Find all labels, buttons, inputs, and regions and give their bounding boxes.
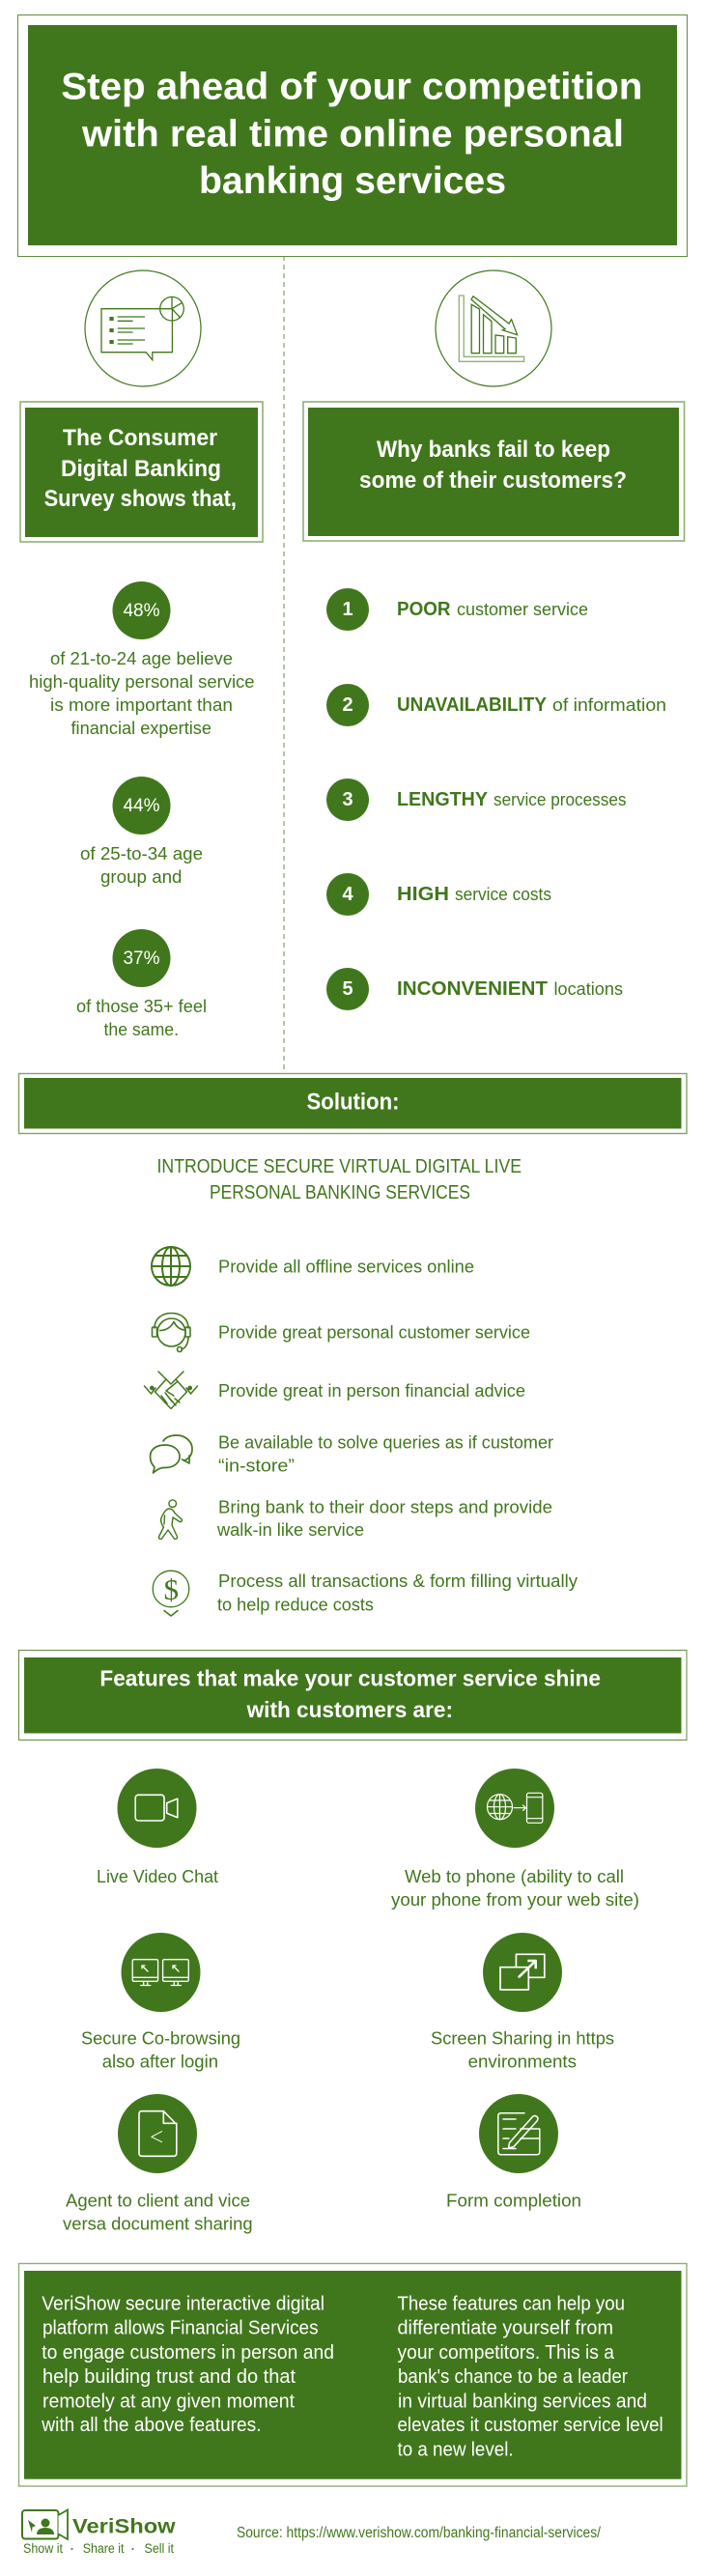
reason 2: UNAVAILABILITY <box>397 694 548 716</box>
heading: consumer survey <box>20 402 263 542</box>
heading: consumer survey: Survey shows that, <box>44 486 237 512</box>
logo: VeriShow: VeriShow <box>72 2516 176 2538</box>
solution item: solve queries: Be available to solve queries as if customer <box>218 1432 553 1452</box>
summary text: right column: elevates it customer service level <box>398 2415 663 2436</box>
feature: form completion <box>446 2094 581 2211</box>
feature: form completion: Form completion <box>446 2191 581 2211</box>
summary text: right column <box>398 2294 663 2461</box>
reason 4: service costs <box>455 885 551 904</box>
summary text: left column: with all the above features. <box>41 2415 261 2436</box>
logo: VeriShow: Sell it <box>145 2541 174 2556</box>
reason 5: INCONVENIENT <box>397 978 548 1000</box>
icon: headset agent <box>153 1314 190 1352</box>
heading: consumer survey: Digital Banking <box>61 456 221 482</box>
solution item: door steps <box>158 1498 552 1540</box>
solution intro text <box>156 1156 522 1203</box>
reason 2 <box>326 684 666 726</box>
summary text: left column: help building trust and do that <box>42 2366 296 2388</box>
icon: declining bar chart <box>436 270 551 386</box>
summary text: right column: differentiate yourself from <box>398 2318 613 2339</box>
reason 4 <box>326 873 551 916</box>
reason 5 <box>326 968 623 1010</box>
summary text: left column: to engage customers in person and <box>42 2342 334 2364</box>
source line: Source: https://www.verishow.com/banking-financial-services/ <box>237 2525 602 2541</box>
stat: 48 percent: financial expertise <box>71 719 212 738</box>
feature: live video chat <box>97 1769 218 1886</box>
reason 5: 5 <box>342 978 353 1000</box>
solution item: online services <box>152 1247 474 1286</box>
solution item: reduce costs: to help reduce costs <box>217 1596 374 1615</box>
summary text: left column: platform allows Financial Services <box>42 2318 319 2339</box>
summary text: right column: to a new level. <box>398 2440 514 2461</box>
summary text: left column: VeriShow secure interactive digital <box>42 2294 324 2315</box>
solution item: financial advice: Provide great in person financial advice <box>218 1381 525 1401</box>
feature: document sharing <box>63 2094 253 2234</box>
stat: 37 percent: 37% <box>124 948 160 969</box>
stat: 44 percent: group and <box>100 867 182 887</box>
reason 3: LENGTHY <box>397 789 489 810</box>
solution item: financial advice <box>145 1372 525 1408</box>
solution item: personal customer service: Provide great personal customer service <box>218 1323 530 1343</box>
reason 2: of information <box>552 695 666 715</box>
stat: 44 percent <box>80 777 203 887</box>
logo: VeriShow <box>22 2509 176 2556</box>
solution item: online services: Provide all offline services online <box>218 1258 474 1277</box>
feature: secure co-browsing: Secure Co-browsing <box>81 2028 240 2049</box>
icon: dollar coin: $ <box>164 1572 179 1606</box>
heading: why banks fail <box>303 402 684 541</box>
solution item: solve queries: “in-store” <box>218 1457 295 1476</box>
summary text: right column: These features can help you <box>398 2294 625 2315</box>
reason 5: locations <box>554 979 623 999</box>
icon: screen share windows <box>500 1954 545 1990</box>
solution intro text: INTRODUCE SECURE VIRTUAL DIGITAL LIVE <box>156 1156 522 1177</box>
reason 3 <box>326 778 626 821</box>
reason 1: customer service <box>457 600 588 619</box>
icon: logo camera <box>22 2509 68 2539</box>
summary text: right column: your competitors. This is a <box>398 2342 615 2364</box>
icon: globe to phone <box>487 1793 543 1823</box>
heading: why banks fail: some of their customers? <box>359 467 627 494</box>
logo: VeriShow: Share it <box>83 2541 125 2556</box>
stat: 48 percent <box>29 581 255 738</box>
icon: globe <box>152 1247 190 1286</box>
reason 2: 2 <box>342 694 353 716</box>
icon: shared document <box>139 2111 177 2156</box>
stat: 48 percent: of 21-to-24 age believe <box>50 649 233 668</box>
logo: VeriShow: Show it <box>23 2541 63 2556</box>
icon: two monitors <box>132 1960 188 1986</box>
feature: web to phone <box>391 1769 639 1910</box>
feature: screen sharing: Screen Sharing in https <box>431 2028 614 2049</box>
reason 1 <box>326 588 588 631</box>
reason 1: 1 <box>342 599 353 620</box>
solution item: reduce costs <box>153 1571 578 1616</box>
summary text: right column: in virtual banking services and <box>398 2392 647 2413</box>
icon: dollar coin <box>153 1571 189 1616</box>
title banner: banking services <box>199 160 506 202</box>
heading: why banks fail: Why banks fail to keep <box>377 437 610 463</box>
heading: solution <box>19 1074 687 1134</box>
stat: 44 percent: of 25-to-34 age <box>80 844 203 863</box>
reason 3: 3 <box>342 789 353 810</box>
feature: document sharing: versa document sharing <box>63 2214 253 2234</box>
feature: secure co-browsing: also after login <box>102 2052 218 2072</box>
solution item: solve queries <box>151 1432 553 1476</box>
title banner <box>17 15 688 257</box>
stat: 48 percent: is more important than <box>50 695 233 715</box>
solution item: door steps: walk-in like service <box>216 1520 364 1540</box>
stat: 48 percent: high-quality personal service <box>29 672 255 692</box>
feature: live video chat: Live Video Chat <box>97 1866 218 1886</box>
solution item: personal customer service <box>153 1314 530 1352</box>
heading: features: with customers are: <box>246 1697 453 1722</box>
title banner: with real time online personal <box>81 114 624 155</box>
icon: walking person <box>158 1500 182 1539</box>
stat: 48 percent: 48% <box>124 601 160 621</box>
feature: web to phone: Web to phone (ability to call <box>405 1866 624 1886</box>
icon: speech bubbles <box>151 1435 192 1473</box>
stat: 44 percent: 44% <box>124 796 160 816</box>
summary text: left column <box>41 2294 334 2436</box>
title banner: Step ahead of your competition <box>61 67 642 108</box>
reason 1: POOR <box>397 599 451 620</box>
solution item: reduce costs: Process all transactions & form filling virtually <box>218 1571 578 1591</box>
summary text: left column: remotely at any given moment <box>42 2392 295 2413</box>
reason 4: HIGH <box>397 884 449 905</box>
reason 3: service processes <box>494 790 626 809</box>
stat: 37 percent <box>76 929 207 1039</box>
icon: video camera <box>135 1795 178 1821</box>
summary panel <box>19 2264 687 2486</box>
feature: document sharing: Agent to client and vice <box>66 2191 250 2211</box>
solution intro text: PERSONAL BANKING SERVICES <box>210 1182 470 1203</box>
stat: 37 percent: the same. <box>104 1020 179 1039</box>
icon: survey chat with pie chart <box>85 270 201 386</box>
heading: features: Features that make your customer service shine <box>99 1666 601 1691</box>
feature: web to phone: your phone from your web site) <box>391 1889 639 1910</box>
reason 4: 4 <box>342 884 353 905</box>
heading: features <box>19 1650 687 1741</box>
icon: handshake <box>145 1372 197 1408</box>
stat: 37 percent: of those 35+ feel <box>76 997 207 1016</box>
heading: solution: Solution: <box>307 1090 400 1116</box>
feature: screen sharing: environments <box>468 2052 577 2072</box>
summary text: right column: bank's chance to be a leader <box>398 2366 628 2388</box>
feature: secure co-browsing <box>81 1933 240 2072</box>
heading: consumer survey: The Consumer <box>63 425 217 451</box>
icon: form and pencil <box>498 2113 540 2155</box>
solution item: door steps: Bring bank to their door steps and provide <box>218 1498 552 1517</box>
feature: screen sharing <box>431 1933 614 2072</box>
